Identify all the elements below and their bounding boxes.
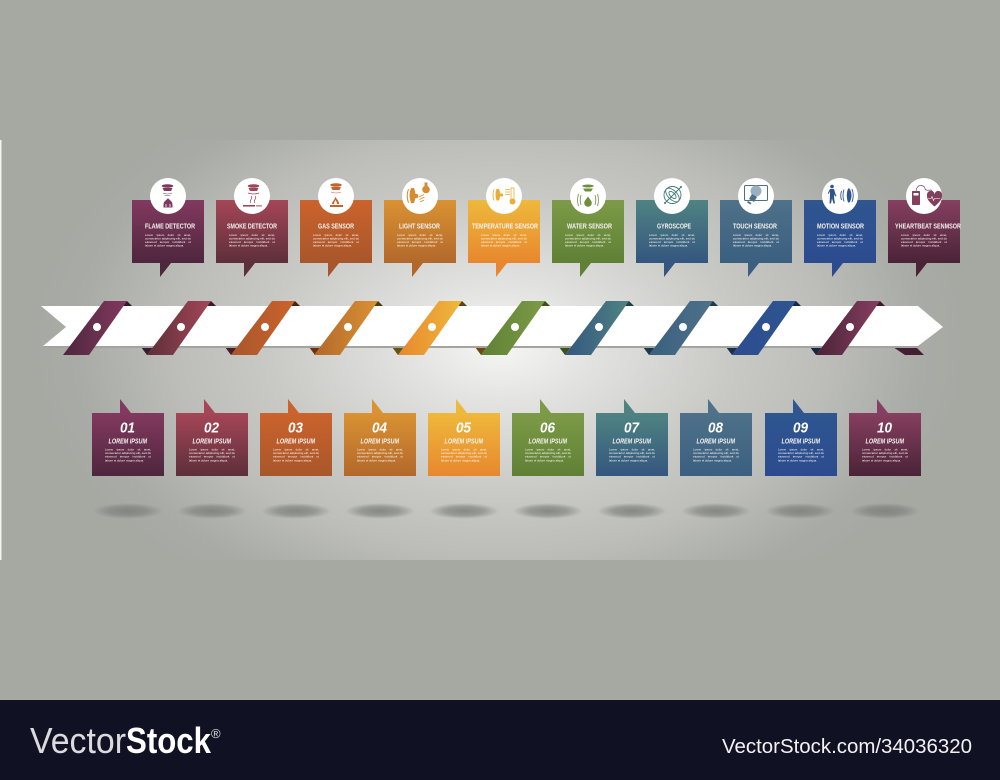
body text: consectetur adipiscing elit, sed do [733, 237, 779, 241]
body text: labore et dolore magna aliqua. [397, 244, 436, 248]
left white edge line [0, 140, 2, 560]
footer image id: VectorStock.com/34036320 [722, 735, 972, 758]
body text: labore et dolore magna aliqua. [733, 244, 772, 248]
body text: eiusmod tempor incididunt ut [441, 455, 487, 459]
body text: eiusmod tempor incididunt ut [525, 455, 571, 459]
ribbon wrap 2 [147, 301, 211, 355]
icon: motion sensor [822, 178, 858, 214]
top card: gyroscope [636, 178, 708, 277]
bottom card 10 [849, 399, 921, 476]
top card: smoke detector [216, 178, 288, 277]
heading: LIGHT SENSOR [399, 224, 440, 230]
bottom card 03 [260, 399, 332, 476]
number: 01 [120, 420, 135, 436]
icon: water sensor [570, 178, 606, 214]
ribbon wrap 5 [398, 301, 462, 355]
body text [441, 448, 487, 462]
body text: labore et dolore magna aliqua. [441, 458, 480, 462]
bottom card 05 [428, 399, 500, 476]
body text [397, 233, 443, 248]
card body [720, 200, 792, 277]
body text: eiusmod tempor incididunt ut [313, 240, 359, 244]
card body [344, 399, 416, 476]
top card: motion sensor [804, 178, 876, 277]
card body [216, 200, 288, 277]
body text: eiusmod tempor incididunt ut [229, 240, 275, 244]
body text [525, 448, 571, 462]
body text: labore et dolore magna aliqua. [525, 458, 564, 462]
heading: WATER SENSOR [567, 224, 612, 230]
heading: TOUCH SENSOR [733, 224, 777, 230]
body text [105, 448, 151, 462]
footer logo [30, 720, 221, 761]
card body [384, 200, 456, 277]
body text: labore et dolore magna aliqua. [862, 458, 901, 462]
body text [649, 233, 695, 248]
heading: LOREM IPSUM [696, 438, 735, 445]
ribbon back folds [121, 301, 924, 355]
heading: LOREM IPSUM [444, 438, 483, 445]
footer bar [0, 700, 1000, 780]
body text: consectetur adipiscing elit, sed do [397, 237, 443, 241]
card body [680, 399, 752, 476]
ribbon wrap 4 [314, 301, 378, 355]
body text [189, 448, 235, 462]
heading: LOREM IPSUM [782, 438, 820, 445]
body text: Lorem ipsum dolor sit amet, [397, 233, 443, 237]
card body [596, 399, 668, 476]
body text: consectetur adipiscing elit, sed do [441, 451, 487, 455]
icon: heartbeat sensor [906, 178, 942, 214]
number: 02 [204, 420, 219, 436]
body text: labore et dolore magna aliqua. [189, 458, 228, 462]
ribbon wrap 10 [816, 301, 880, 355]
heading: GAS SENSOR [318, 224, 354, 230]
body text: consectetur adipiscing elit, sed do [609, 451, 655, 455]
icon: gyroscope [654, 178, 690, 214]
body text [609, 448, 655, 462]
body text: labore et dolore magna aliqua. [901, 244, 940, 248]
body text: eiusmod tempor incididunt ut [565, 240, 611, 244]
body text [693, 448, 739, 462]
body text: labore et dolore magna aliqua. [693, 458, 732, 462]
card body [428, 399, 500, 476]
card body [176, 399, 248, 476]
bottom card 07 [596, 399, 668, 476]
number: 07 [624, 420, 640, 436]
body text: labore et dolore magna aliqua. [817, 244, 856, 248]
body text: labore et dolore magna aliqua. [481, 244, 520, 248]
body text: consectetur adipiscing elit, sed do [901, 237, 947, 241]
heading: MOTION SENSOR [817, 224, 864, 230]
bottom card 01 [92, 399, 164, 476]
body text: labore et dolore magna aliqua. [313, 244, 352, 248]
icon: touch sensor [738, 178, 774, 214]
body text: Lorem ipsum dolor sit amet, [609, 448, 655, 452]
timeline ribbon [41, 301, 943, 355]
heading: LOREM IPSUM [612, 438, 651, 445]
body text: consectetur adipiscing elit, sed do [313, 237, 359, 241]
body text: consectetur adipiscing elit, sed do [693, 451, 739, 455]
card body [636, 200, 708, 277]
bottom card 06 [512, 399, 584, 476]
body text: eiusmod tempor incididunt ut [481, 240, 527, 244]
card body [132, 200, 204, 277]
central glow panel [0, 140, 1000, 560]
top card: light sensor [384, 178, 456, 277]
number: 03 [288, 420, 303, 436]
heading: LOREM IPSUM [528, 438, 567, 445]
heading: FLAME DETECTOR [145, 224, 195, 230]
body text: eiusmod tempor incididunt ut [145, 240, 191, 244]
body text: eiusmod tempor incididunt ut [649, 240, 695, 244]
body text: consectetur adipiscing elit, sed do [649, 237, 695, 241]
body text: labore et dolore magna aliqua. [145, 244, 184, 248]
heading: SMOKE DETECTOR [227, 224, 277, 230]
body text: Lorem ipsum dolor sit amet, [105, 448, 151, 452]
card body [300, 200, 372, 277]
top card: touch sensor [720, 178, 792, 277]
body text [817, 233, 863, 248]
top card: flame detector [132, 178, 204, 277]
ribbon wrap 3 [231, 301, 295, 355]
card body [512, 399, 584, 476]
ribbon shadow line [44, 345, 922, 348]
top card: gas sensor [300, 178, 372, 277]
number: 09 [793, 420, 808, 436]
body text: consectetur adipiscing elit, sed do [273, 451, 319, 455]
body text: labore et dolore magna aliqua. [778, 458, 817, 462]
icon: temperature sensor [486, 178, 522, 214]
body text: eiusmod tempor incididunt ut [901, 240, 947, 244]
body text: consectetur adipiscing elit, sed do [565, 237, 611, 241]
bottom card 02 [176, 399, 248, 476]
body text [901, 233, 947, 248]
white arrow band [41, 306, 943, 346]
card body [92, 399, 164, 476]
bottom card 04 [344, 399, 416, 476]
ribbon wrap 8 [649, 301, 713, 355]
body text: Lorem ipsum dolor sit amet, [145, 233, 191, 237]
body text: consectetur adipiscing elit, sed do [481, 237, 527, 241]
body text: consectetur adipiscing elit, sed do [525, 451, 571, 455]
body text: eiusmod tempor incididunt ut [273, 455, 319, 459]
icon: smoke detector [234, 178, 270, 214]
card body [260, 399, 332, 476]
heading: TEMPERATURE SENSOR [472, 224, 538, 230]
heading: LOREM IPSUM [192, 438, 231, 445]
body text: consectetur adipiscing elit, sed do [862, 451, 908, 455]
body text: consectetur adipiscing elit, sed do [778, 451, 824, 455]
icon: light sensor [402, 178, 438, 214]
heading: LOREM IPSUM [276, 438, 315, 445]
heading: GYROSCOPE [657, 224, 691, 230]
body text: labore et dolore magna aliqua. [357, 458, 396, 462]
body text: Lorem ipsum dolor sit amet, [313, 233, 359, 237]
body text: consectetur adipiscing elit, sed do [145, 237, 191, 241]
body text: consectetur adipiscing elit, sed do [105, 451, 151, 455]
body text [357, 448, 403, 462]
body text: Lorem ipsum dolor sit amet, [565, 233, 611, 237]
top card: heartbeat sensor [888, 178, 961, 277]
card body [552, 200, 624, 277]
body text: labore et dolore magna aliqua. [273, 458, 312, 462]
ribbon wrap 6 [481, 301, 545, 355]
body text: Lorem ipsum dolor sit amet, [649, 233, 695, 237]
bottom card 08 [680, 399, 752, 476]
ribbon wrap 1 [63, 301, 127, 355]
ribbon wrap 9 [732, 301, 796, 355]
body text: Lorem ipsum dolor sit amet, [229, 233, 275, 237]
body text: labore et dolore magna aliqua. [649, 244, 688, 248]
body text: eiusmod tempor incididunt ut [693, 455, 739, 459]
body text: consectetur adipiscing elit, sed do [189, 451, 235, 455]
body text: consectetur adipiscing elit, sed do [357, 451, 403, 455]
body text: Lorem ipsum dolor sit amet, [778, 448, 824, 452]
heading: LOREM IPSUM [360, 438, 399, 445]
icon: gas sensor [318, 178, 354, 214]
body text: eiusmod tempor incididunt ut [105, 455, 151, 459]
top card: water sensor [552, 178, 624, 277]
number: 08 [708, 420, 724, 436]
body text [862, 448, 908, 462]
body text: eiusmod tempor incididunt ut [817, 240, 863, 244]
body text [313, 233, 359, 248]
ribbon wrap 7 [565, 301, 629, 355]
heading: YHEARTBEAT SENMSOR [895, 224, 961, 230]
card body [468, 200, 540, 277]
body text [481, 233, 527, 248]
body text [733, 233, 779, 248]
body text: Lorem ipsum dolor sit amet, [733, 233, 779, 237]
body text: labore et dolore magna aliqua. [229, 244, 268, 248]
icon: flame detector [150, 178, 186, 214]
number: 10 [877, 420, 892, 436]
footer logo: Vector [30, 720, 126, 761]
bottom card 09 [765, 399, 837, 476]
heading: LOREM IPSUM [866, 438, 904, 445]
body text: Lorem ipsum dolor sit amet, [441, 448, 487, 452]
body text: Lorem ipsum dolor sit amet, [817, 233, 863, 237]
body text: eiusmod tempor incididunt ut [609, 455, 655, 459]
card body [804, 200, 876, 277]
body text: Lorem ipsum dolor sit amet, [525, 448, 571, 452]
body text: labore et dolore magna aliqua. [105, 458, 144, 462]
body text: Lorem ipsum dolor sit amet, [862, 448, 908, 452]
body text [273, 448, 319, 462]
footer logo: Stock [126, 720, 212, 761]
body text [229, 233, 275, 248]
floor shadows [93, 503, 920, 519]
card body [888, 200, 960, 277]
body text: Lorem ipsum dolor sit amet, [189, 448, 235, 452]
body text: consectetur adipiscing elit, sed do [229, 237, 275, 241]
body text: labore et dolore magna aliqua. [565, 244, 604, 248]
body text: eiusmod tempor incididunt ut [189, 455, 235, 459]
footer logo: ® [211, 726, 221, 741]
top card: temperature sensor [468, 178, 540, 277]
body text: labore et dolore magna aliqua. [609, 458, 648, 462]
body text: Lorem ipsum dolor sit amet, [693, 448, 739, 452]
body text: Lorem ipsum dolor sit amet, [901, 233, 947, 237]
body text: eiusmod tempor incididunt ut [733, 240, 779, 244]
body text: eiusmod tempor incididunt ut [862, 455, 908, 459]
body text: Lorem ipsum dolor sit amet, [273, 448, 319, 452]
heading: LOREM IPSUM [108, 438, 147, 445]
number: 06 [540, 420, 556, 436]
body text [145, 233, 191, 248]
body text [565, 233, 611, 248]
number: 05 [456, 420, 472, 436]
body text: eiusmod tempor incididunt ut [357, 455, 403, 459]
body text: eiusmod tempor incididunt ut [397, 240, 443, 244]
body text: consectetur adipiscing elit, sed do [817, 237, 863, 241]
body text: eiusmod tempor incididunt ut [778, 455, 824, 459]
body text: Lorem ipsum dolor sit amet, [481, 233, 527, 237]
card body [765, 399, 837, 476]
number: 04 [372, 420, 387, 436]
body text: Lorem ipsum dolor sit amet, [357, 448, 403, 452]
card body [849, 399, 921, 476]
body text [778, 448, 824, 462]
